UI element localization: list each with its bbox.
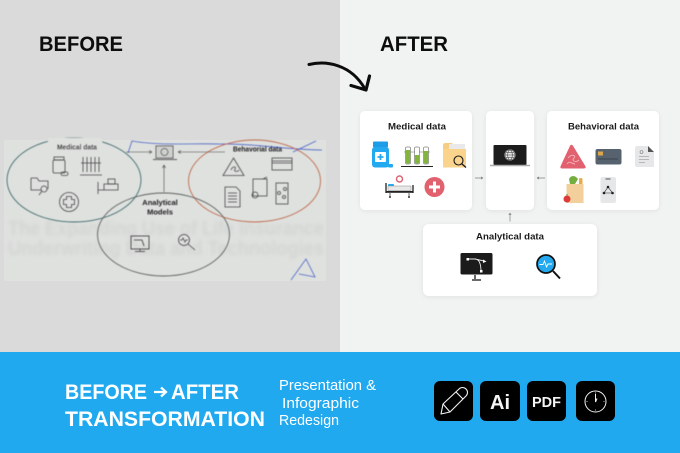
banner title [65,381,265,431]
panel: before photo of hand-annotated diagram [4,138,326,281]
diagram ellipse: medical data [7,138,141,222]
icon: PDF tile [527,381,566,421]
banner title: TRANSFORMATION [65,408,265,431]
card heading: behavioral data: Behavioral data [568,122,640,132]
icon: folder search [31,178,48,195]
icon: monitor with vector path [460,253,492,280]
icon: laptop with globe [490,145,530,166]
arrow in title [154,388,166,396]
icon: shopping bag [252,177,267,198]
card: medical data [360,111,472,210]
diagram ellipse: analytical models [98,193,230,276]
faded printed text showing through: Underwriting Data and Technologies [8,238,324,260]
banner subtitle: Redesign [279,413,339,429]
panel: before background [0,0,340,352]
icon: grocery bag [564,176,584,203]
icon: hospital bed [98,179,118,194]
icon: credit card [596,149,622,164]
blue pen scribbles [128,141,322,280]
icon: warning triangle [561,145,585,168]
icon: document [225,187,240,207]
heading: before: BEFORE [39,33,123,56]
icon: pencil tile [434,381,473,421]
icon: document [635,146,654,167]
icon: plus in circle [60,192,78,212]
connector arrows between cards [475,177,545,222]
icon: Ai tile: Ai [490,392,510,414]
faded printed text showing through [8,218,324,260]
icon: medicine bottle [53,157,68,176]
card: analytical data [423,224,597,296]
faded printed text showing through: The Expanding Use of Life Insurance [8,218,324,240]
icon: hospital bed [386,176,413,198]
arrow: before to after [309,63,370,90]
panel: after background [340,0,680,352]
label: behavioral data: Behavorial data [233,144,283,154]
icon: warning triangle [223,158,244,176]
label: medical data: Medical data [57,142,98,152]
icon: Ai tile [480,381,520,421]
connector arrows [126,150,225,192]
banner title: BEFORE [65,381,147,404]
icon: mobile network [276,183,288,204]
icon: magnifier with pulse [537,255,560,278]
card heading: medical data: Medical data [388,122,447,132]
icon: clock tile [576,381,615,421]
card: central laptop [486,111,534,210]
icon: red cross circle [424,177,444,197]
icon: laptop with globe [153,146,177,160]
label: analytical models: Analytical [142,198,178,207]
icon: PDF tile: PDF [532,394,561,411]
icon: monitor [131,236,149,252]
banner title: AFTER [171,381,239,404]
label: analytical models: Models [147,208,173,216]
banner: bottom bar [0,352,680,453]
icon: phone with network [600,177,616,203]
card: behavioral data [547,111,659,210]
banner subtitle: Infographic [282,396,359,412]
icon: folder with magnifier [443,143,466,168]
icon: magnifier with pulse [178,234,195,250]
icon: medicine bottle [372,142,393,168]
heading: after: AFTER [380,33,448,56]
icon: credit card [272,158,292,170]
banner subtitle: Presentation & [279,378,376,394]
icon: test tubes [401,147,433,166]
label: medical data [48,138,102,152]
banner subtitle [279,378,376,429]
diagram ellipse: behavioral data [188,140,320,222]
icon: test tubes [80,157,102,175]
card heading: analytical data: Analytical data [476,232,545,242]
